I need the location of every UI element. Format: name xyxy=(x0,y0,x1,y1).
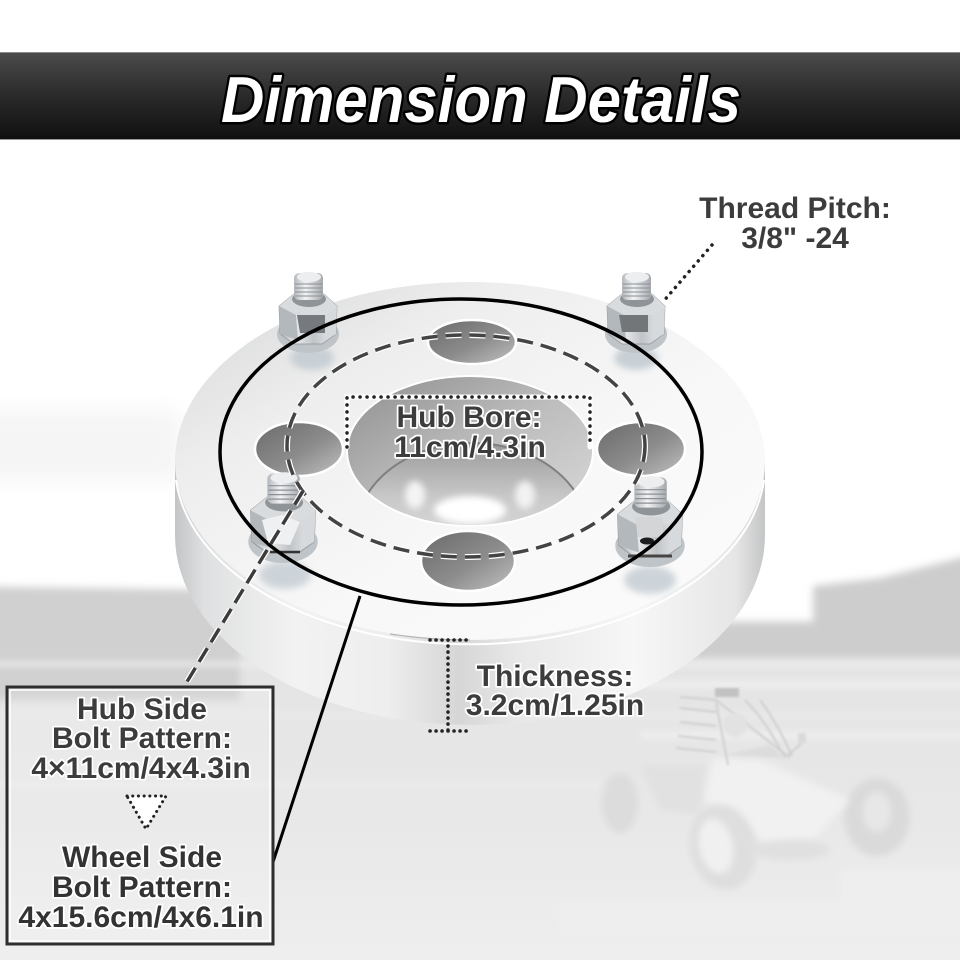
wheel side text xyxy=(18,841,264,934)
wheel side pattern circle (solid) xyxy=(220,299,702,605)
wheel side text: 4x15.6cm/4x6.1in xyxy=(18,901,264,934)
dashed leader to bolt pattern box xyxy=(185,491,303,685)
thread pitch label: Thread Pitch: xyxy=(699,192,891,225)
header band xyxy=(0,52,960,140)
image: off-road buggy, faded xyxy=(602,688,910,896)
wheel spacer body xyxy=(175,282,765,725)
title: Dimension Details xyxy=(221,63,741,136)
hub side pattern circle (dashed) xyxy=(287,335,645,557)
stud: rear left xyxy=(277,272,339,370)
bolt holes xyxy=(255,320,685,591)
stud: rear right xyxy=(605,272,667,370)
center bore xyxy=(346,375,592,525)
hub bore dimension bracket xyxy=(347,397,590,447)
wheel side text: Bolt Pattern: xyxy=(52,871,232,904)
hub side text: Hub Side xyxy=(77,693,207,726)
stud: front right xyxy=(615,476,685,594)
thickness value: 3.2cm/1.25in xyxy=(466,689,644,722)
thickness bracket xyxy=(430,640,468,731)
bolt pattern box xyxy=(7,687,273,944)
stud: front left xyxy=(248,472,318,589)
wheel side text: Wheel Side xyxy=(62,841,222,874)
thread pitch leader xyxy=(662,245,712,303)
hub side text: 4×11cm/4x4.3in xyxy=(31,752,251,785)
dotted down triangle xyxy=(127,796,166,829)
hub side text xyxy=(31,693,251,785)
hub side text: Bolt Pattern: xyxy=(52,722,232,755)
thread pitch value: 3/8" -24 xyxy=(741,222,849,255)
hub bore label: Hub Bore: xyxy=(396,401,542,434)
thickness label: Thickness: xyxy=(477,660,633,693)
hub bore value: 11cm/4.3in xyxy=(394,431,546,464)
solid leader to bolt pattern box xyxy=(273,596,360,862)
